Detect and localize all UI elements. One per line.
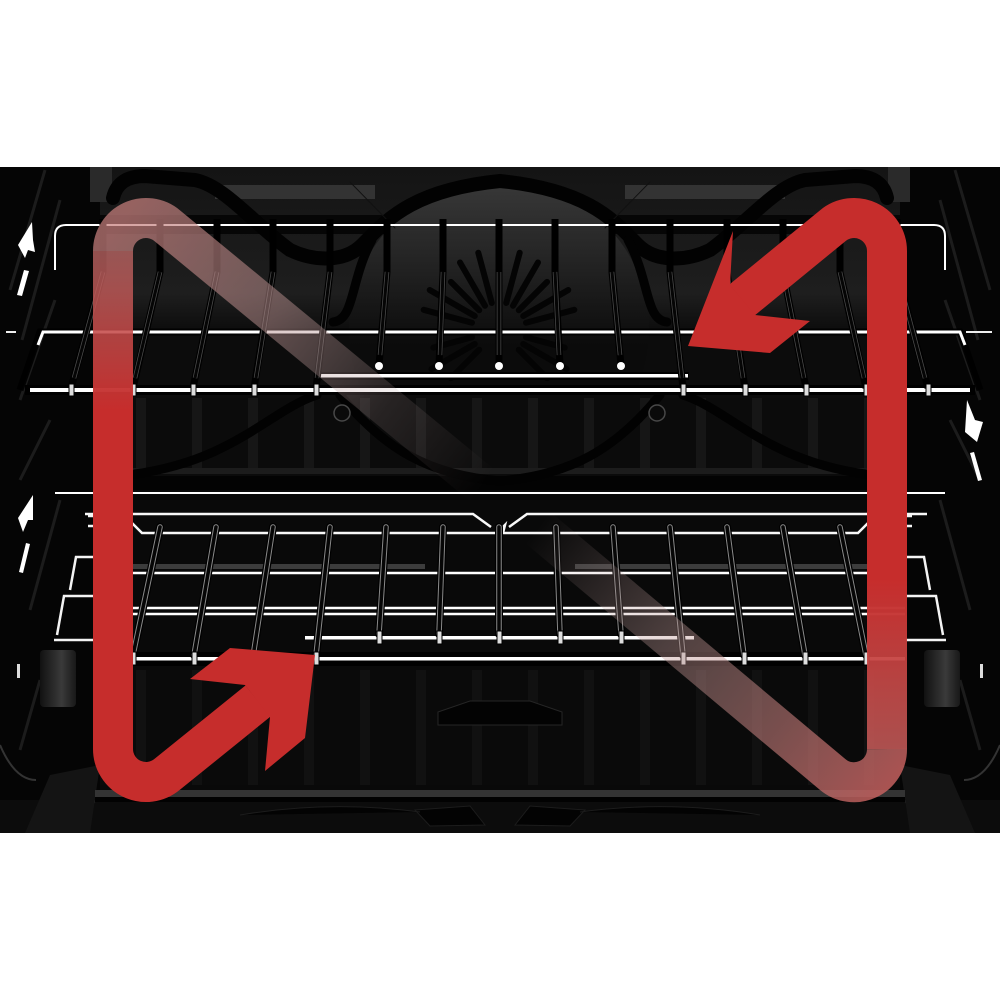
upper diagonal airflow band (113, 218, 500, 500)
convection fan (420, 250, 578, 344)
top-right arrowhead (688, 231, 810, 353)
left airflow column (93, 251, 133, 410)
lower rack guide rails (54, 516, 946, 640)
bottom-left arrowhead (190, 648, 315, 771)
oven cavity infographic (0, 167, 1000, 833)
mounting screws (334, 405, 665, 421)
upper oven rack (6, 219, 992, 396)
white shelf-position markers (17, 222, 983, 573)
lower oven rack (55, 493, 945, 666)
right airflow column (867, 580, 907, 749)
floor and lower fan (95, 701, 905, 826)
top-right arrow shaft (742, 218, 887, 580)
lower rack rollers (17, 650, 983, 707)
red airflow loop (113, 218, 887, 782)
lower diagonal airflow band (530, 521, 887, 782)
back wall duct curves (113, 176, 887, 481)
side wall details (0, 170, 1000, 833)
bottom-left arrow shaft (113, 410, 258, 782)
oven interior background (0, 167, 1000, 833)
